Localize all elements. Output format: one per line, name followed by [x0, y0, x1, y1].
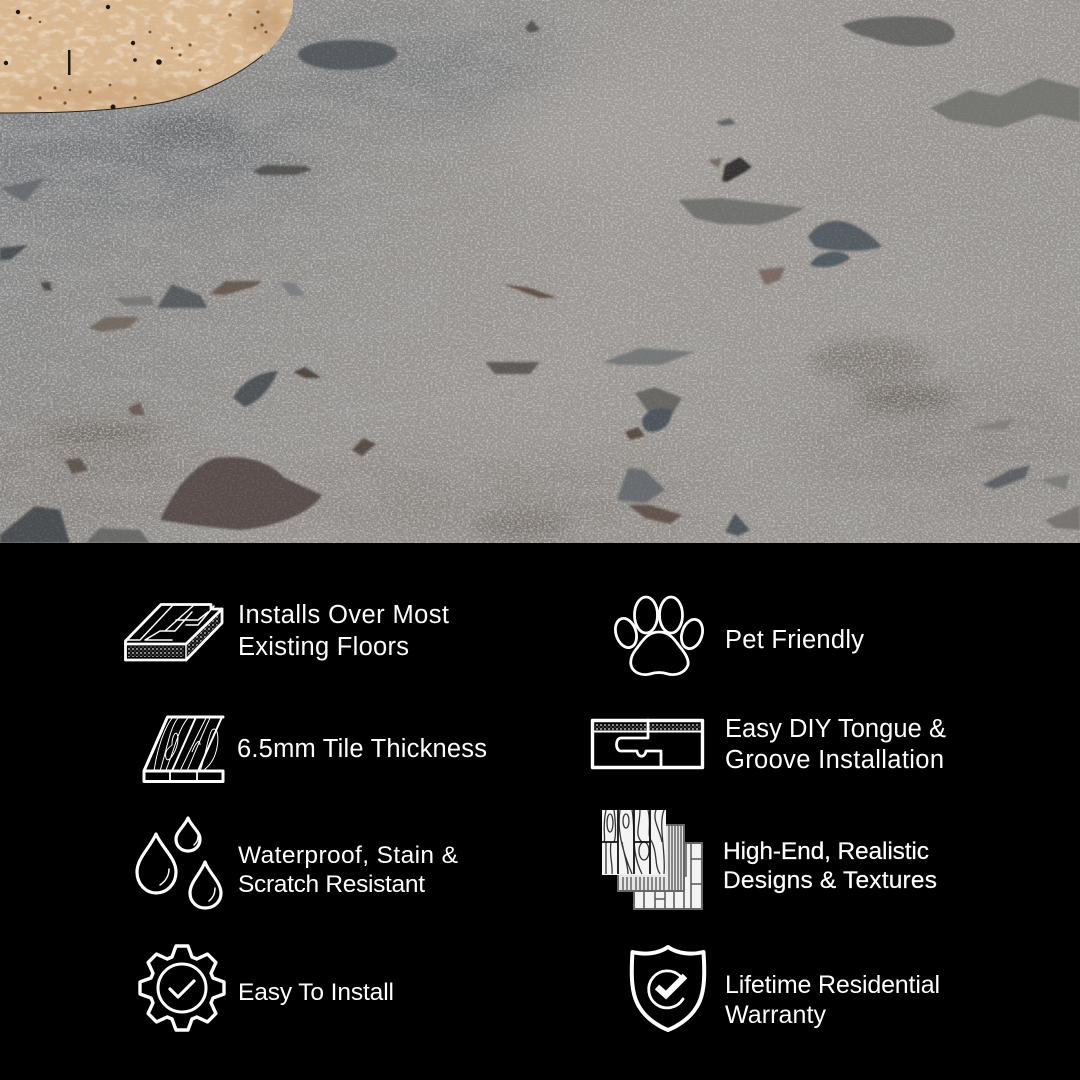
feature: installs over most existing floors: [126, 601, 449, 661]
text: easy to install: Easy To Install: [238, 979, 394, 1006]
text: lifetime residential warranty: Lifetime Residential: [725, 971, 940, 999]
icon: wood plank: [144, 717, 223, 782]
cork stool: [0, 0, 300, 115]
feature: pet friendly: [612, 597, 864, 675]
text: easy diy tongue and groove installation: Groove Installation: [725, 746, 944, 774]
text: high-end realistic designs and textures: High-End, Realistic: [723, 838, 929, 865]
text: easy diy tongue and groove installation: Easy DIY Tongue &: [725, 715, 946, 743]
feature: lifetime residential warranty: [632, 947, 940, 1030]
text: high-end realistic designs and textures: Designs & Textures: [723, 867, 937, 894]
feature: tile thickness: [144, 717, 487, 782]
text: installs over most existing floors: [238, 601, 449, 661]
feature: tongue and groove: [592, 715, 946, 774]
text: easy diy tongue and groove installation: [725, 715, 946, 774]
text: lifetime residential warranty: [725, 971, 940, 1029]
feature: easy to install: [140, 946, 394, 1030]
icon: stacked material swatches: [602, 810, 702, 909]
text: installs over most existing floors: Existing Floors: [238, 633, 409, 661]
text: installs over most existing floors: Installs Over Most: [238, 601, 449, 629]
text: waterproof, stain and scratch resistant: Waterproof, Stain &: [238, 842, 458, 869]
photo: terrazzo stone floor: [0, 0, 1080, 543]
text: lifetime residential warranty: Warranty: [725, 1001, 826, 1029]
icon: gear with check: [140, 946, 224, 1030]
icon: shield with check: [632, 947, 704, 1030]
feature: high-end realistic designs: [602, 810, 937, 909]
icon: floor layers: [126, 604, 222, 660]
text: pet friendly: Pet Friendly: [725, 626, 864, 654]
text: high-end realistic designs and textures: [723, 838, 937, 894]
icon: water drops: [137, 818, 221, 908]
icon: tongue and groove joint: [592, 720, 702, 768]
text: waterproof, stain and scratch resistant: [238, 842, 458, 898]
text: 6.5mm tile thickness: 6.5mm Tile Thickness: [237, 735, 487, 763]
icon: paw print: [612, 597, 706, 675]
text: waterproof, stain and scratch resistant: Scratch Resistant: [238, 871, 425, 898]
feature: waterproof: [137, 818, 458, 908]
